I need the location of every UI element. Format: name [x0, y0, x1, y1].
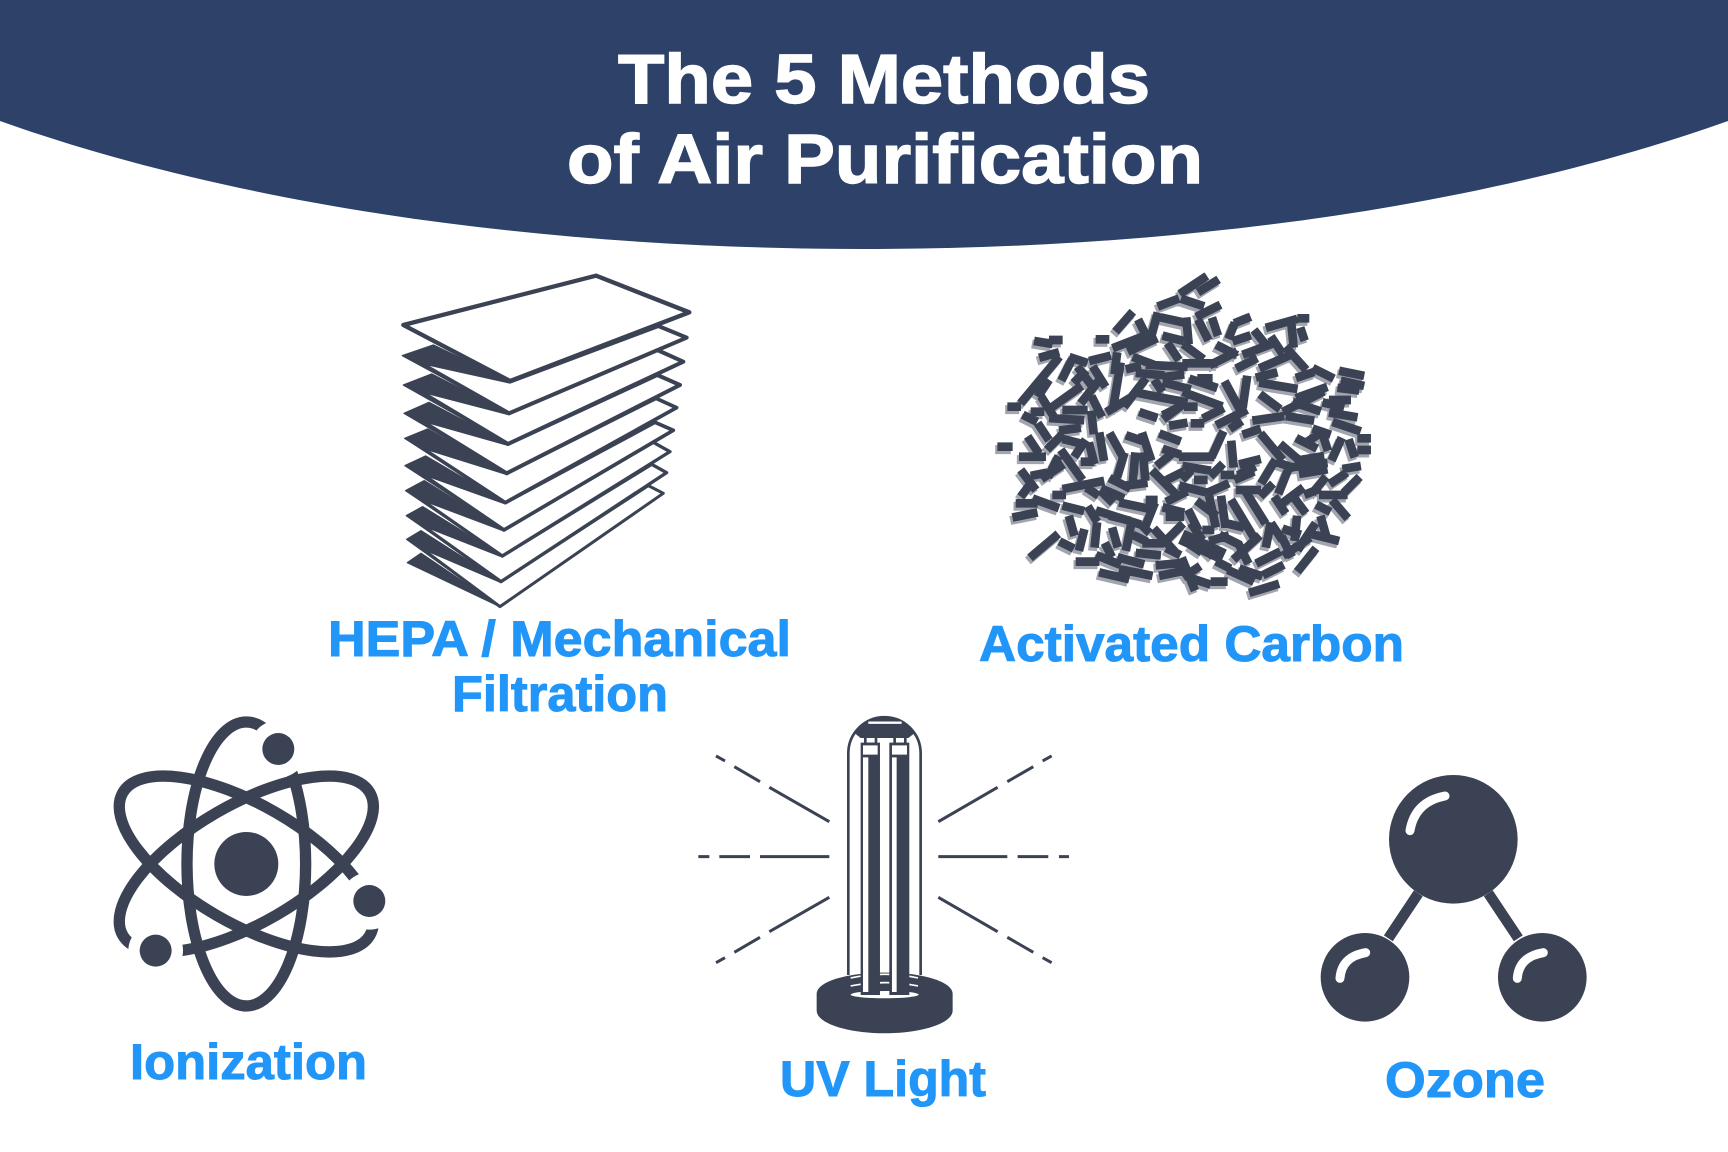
label: HEPA / Mechanical Filtration: HEPA / Mechanical	[328, 611, 791, 667]
icon: activated carbon pellets	[1000, 278, 1367, 595]
glass tube	[848, 717, 921, 975]
lamp base	[817, 973, 953, 1033]
title	[567, 40, 1203, 198]
label: UV Light: UV Light	[780, 1051, 986, 1107]
icon: UV light lamp	[698, 717, 1069, 1033]
icon: ozone molecule	[1321, 775, 1587, 1022]
label: Ionization: Ionization	[130, 1034, 367, 1090]
label: Activated Carbon: Activated Carbon	[979, 616, 1404, 672]
icon: atom for ionization	[93, 720, 400, 1006]
title: The 5 Methods	[618, 40, 1150, 118]
header banner	[0, 0, 1728, 249]
title: of Air Purification	[567, 120, 1203, 198]
light rays	[698, 756, 1069, 963]
lamp rods	[861, 737, 909, 995]
label: HEPA / Mechanical Filtration: Filtration	[452, 666, 668, 722]
icon: HEPA pleated filter	[402, 276, 689, 607]
label: HEPA / Mechanical Filtration	[328, 611, 791, 722]
label: Ozone: Ozone	[1385, 1052, 1545, 1108]
lamp cap	[855, 717, 914, 738]
